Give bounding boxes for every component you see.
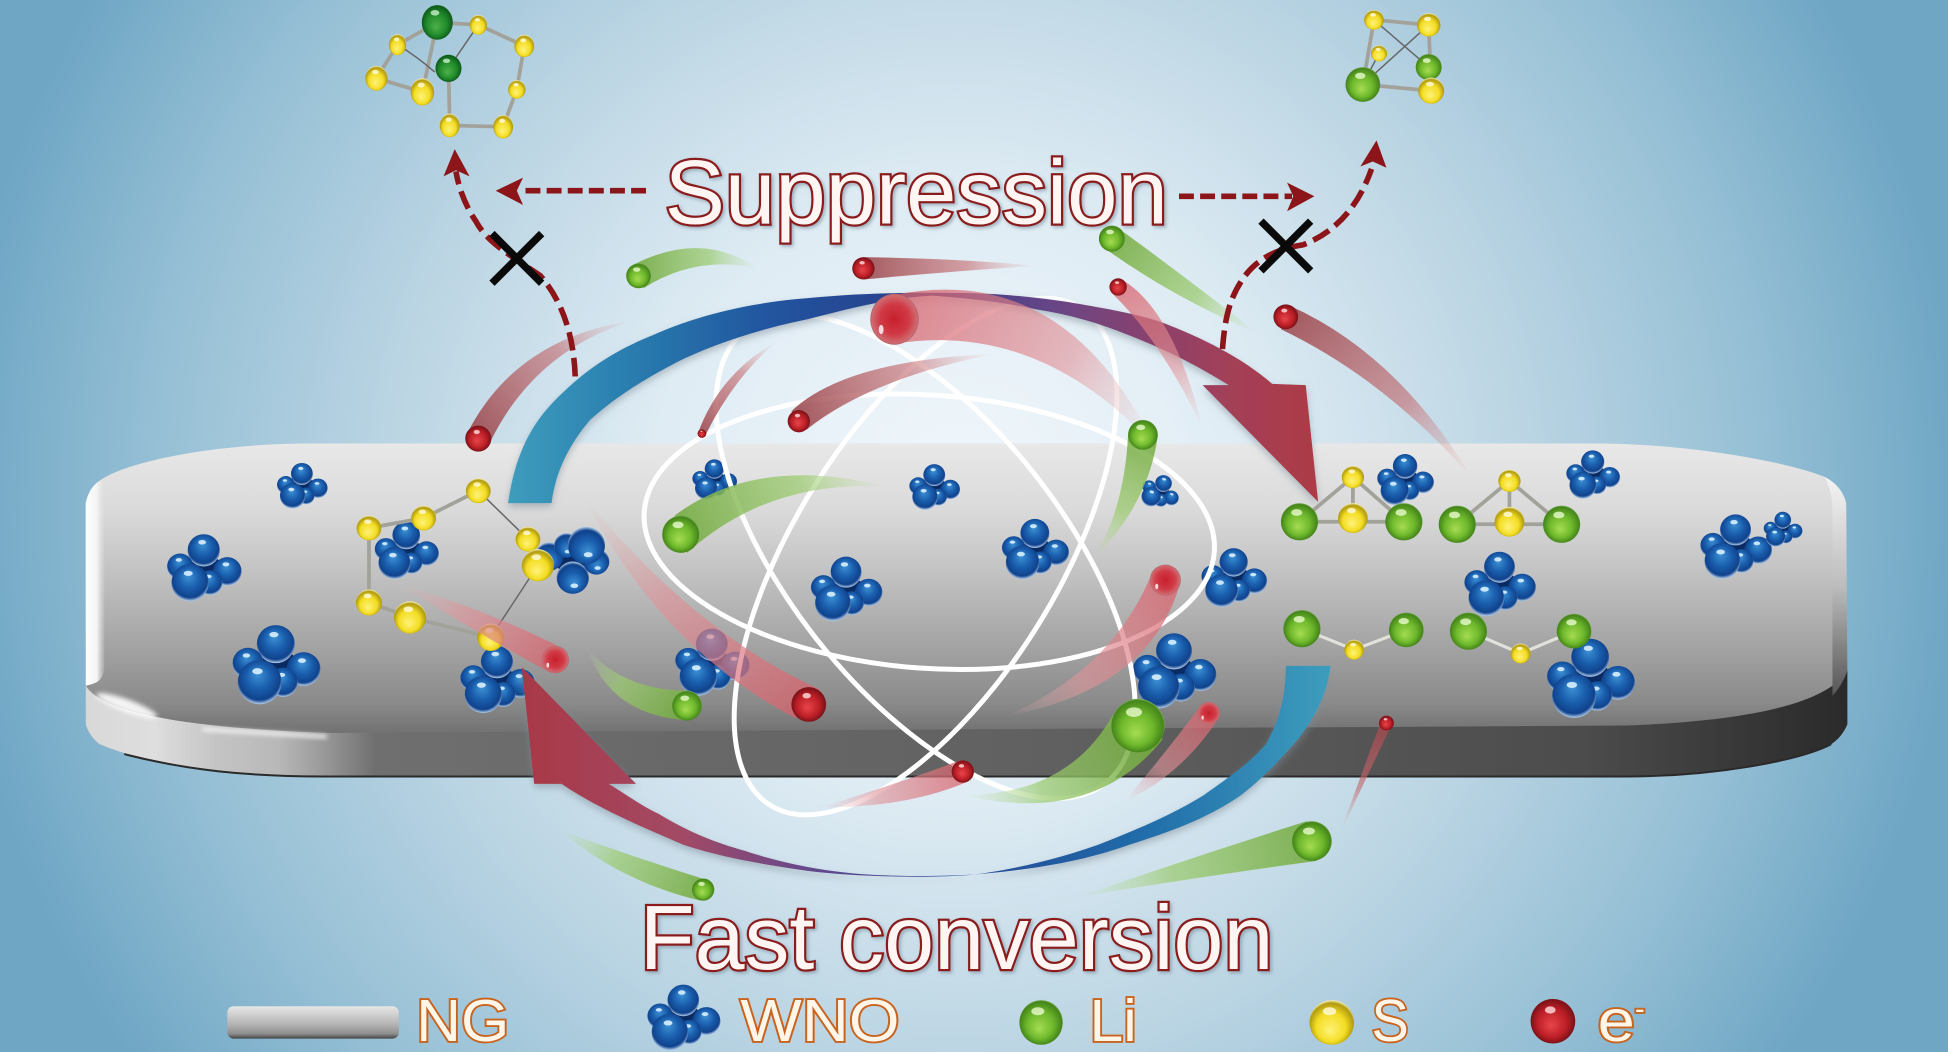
molecule: escaping polysulfide top right — [1345, 10, 1444, 104]
plate right edge — [1825, 477, 1847, 696]
legend: electron ball: - — [1635, 993, 1645, 1026]
arrow: blocked dashed path left — [444, 149, 575, 376]
plate rim highlights — [94, 689, 327, 737]
legend: S ball — [1309, 987, 1409, 1052]
icon: atom orbit rings — [635, 238, 1224, 875]
panel: NG graphene plate — [86, 444, 1847, 776]
legend — [227, 985, 1645, 1052]
legend: Li ball — [1019, 987, 1137, 1052]
arrow: top curved suppression-to-product arrow — [508, 293, 1318, 503]
arrow: suppression pointing left — [496, 178, 646, 205]
lithium comets (green) — [559, 225, 1332, 901]
legend: NG bar — [227, 987, 509, 1052]
molecule: S8 ring on plate — [356, 478, 554, 651]
arrow: bottom curved fast-conversion arrow — [522, 666, 1331, 877]
WNO clusters on plate — [167, 450, 1802, 718]
icon: right cross mark — [1261, 221, 1311, 271]
molecules: Li2S2 and Li2S on plate — [1281, 466, 1591, 663]
arrow: blocked dashed path right — [1222, 140, 1386, 349]
heading: Suppression: Suppression — [665, 143, 1168, 244]
heading: Fast conversion: Fast conversion — [640, 888, 1273, 989]
legend: WNO cluster — [647, 985, 899, 1052]
plate left bright edge — [86, 477, 106, 686]
plate lower rim — [86, 671, 1847, 776]
arrow: suppression pointing right — [1179, 183, 1314, 211]
plate bottom dark edge — [124, 744, 1831, 776]
legend: electron ball — [1531, 987, 1645, 1052]
molecule: escaping polysulfide top left — [365, 5, 534, 139]
electron comets (red) — [398, 257, 1472, 832]
icon: left cross mark — [492, 234, 542, 283]
